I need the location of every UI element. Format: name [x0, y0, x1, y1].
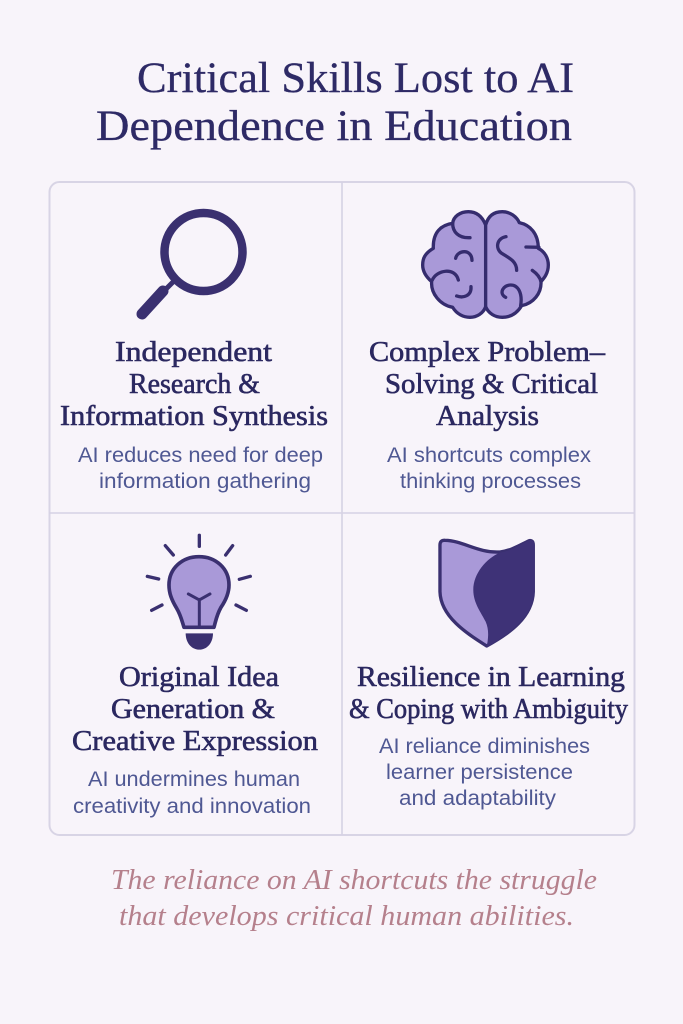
- icon: light bulb: [147, 535, 250, 650]
- heading: original idea generation: Original Idea: [119, 662, 279, 693]
- text: independent research description: AI reduces need for deep: [78, 443, 323, 467]
- heading: complex problem solving: Complex Problem–: [369, 337, 606, 368]
- heading: complex problem solving: Solving & Critical: [385, 369, 598, 400]
- text: resilience description: and adaptability: [399, 786, 556, 810]
- text: original idea description: creativity and innovation: [73, 794, 311, 818]
- footer quote: The reliance on AI shortcuts the struggle: [111, 864, 597, 896]
- text: complex problem solving description: thinking processes: [400, 469, 581, 493]
- heading: complex problem solving: [369, 337, 606, 432]
- text: independent research description: [78, 443, 323, 493]
- heading: original idea generation: Generation &: [111, 694, 275, 725]
- heading: independent research: Information Synthesis: [60, 401, 328, 432]
- text: original idea description: [73, 767, 311, 818]
- heading: resilience in learning: & Coping with Ambiguity: [349, 694, 629, 725]
- text: resilience description: [379, 734, 590, 810]
- panel: resilience in learning: [349, 540, 629, 810]
- footer quote: that develops critical human abilities.: [119, 900, 574, 932]
- text: complex problem solving description: [387, 443, 591, 493]
- heading: original idea generation: Creative Expression: [72, 726, 318, 757]
- text: complex problem solving description: AI shortcuts complex: [387, 443, 591, 467]
- heading: independent research: [60, 337, 328, 432]
- icon: brain: [423, 212, 548, 317]
- title: Dependence in Education: [96, 103, 572, 150]
- heading: resilience in learning: [349, 662, 629, 725]
- heading: independent research: Research &: [129, 369, 260, 400]
- heading: original idea generation: [72, 662, 318, 757]
- title: [96, 55, 574, 150]
- heading: resilience in learning: Resilience in Learning: [357, 662, 625, 693]
- text: original idea description: AI undermines human: [88, 767, 300, 791]
- panel: independent research: [60, 213, 328, 493]
- title: Critical Skills Lost to AI: [137, 55, 574, 102]
- heading: independent research: Independent: [115, 337, 272, 368]
- footer quote: [111, 864, 597, 932]
- panel: skills grid: [49, 182, 634, 835]
- text: independent research description: information gathering: [99, 469, 311, 493]
- panel: complex problem solving: [369, 212, 606, 493]
- icon: magnifying glass: [142, 213, 242, 314]
- heading: complex problem solving: Analysis: [436, 401, 539, 432]
- panel: original idea generation: [72, 535, 318, 818]
- text: resilience description: AI reliance diminishes: [379, 734, 590, 758]
- icon: shield: [440, 540, 534, 647]
- text: resilience description: learner persistence: [386, 760, 573, 784]
